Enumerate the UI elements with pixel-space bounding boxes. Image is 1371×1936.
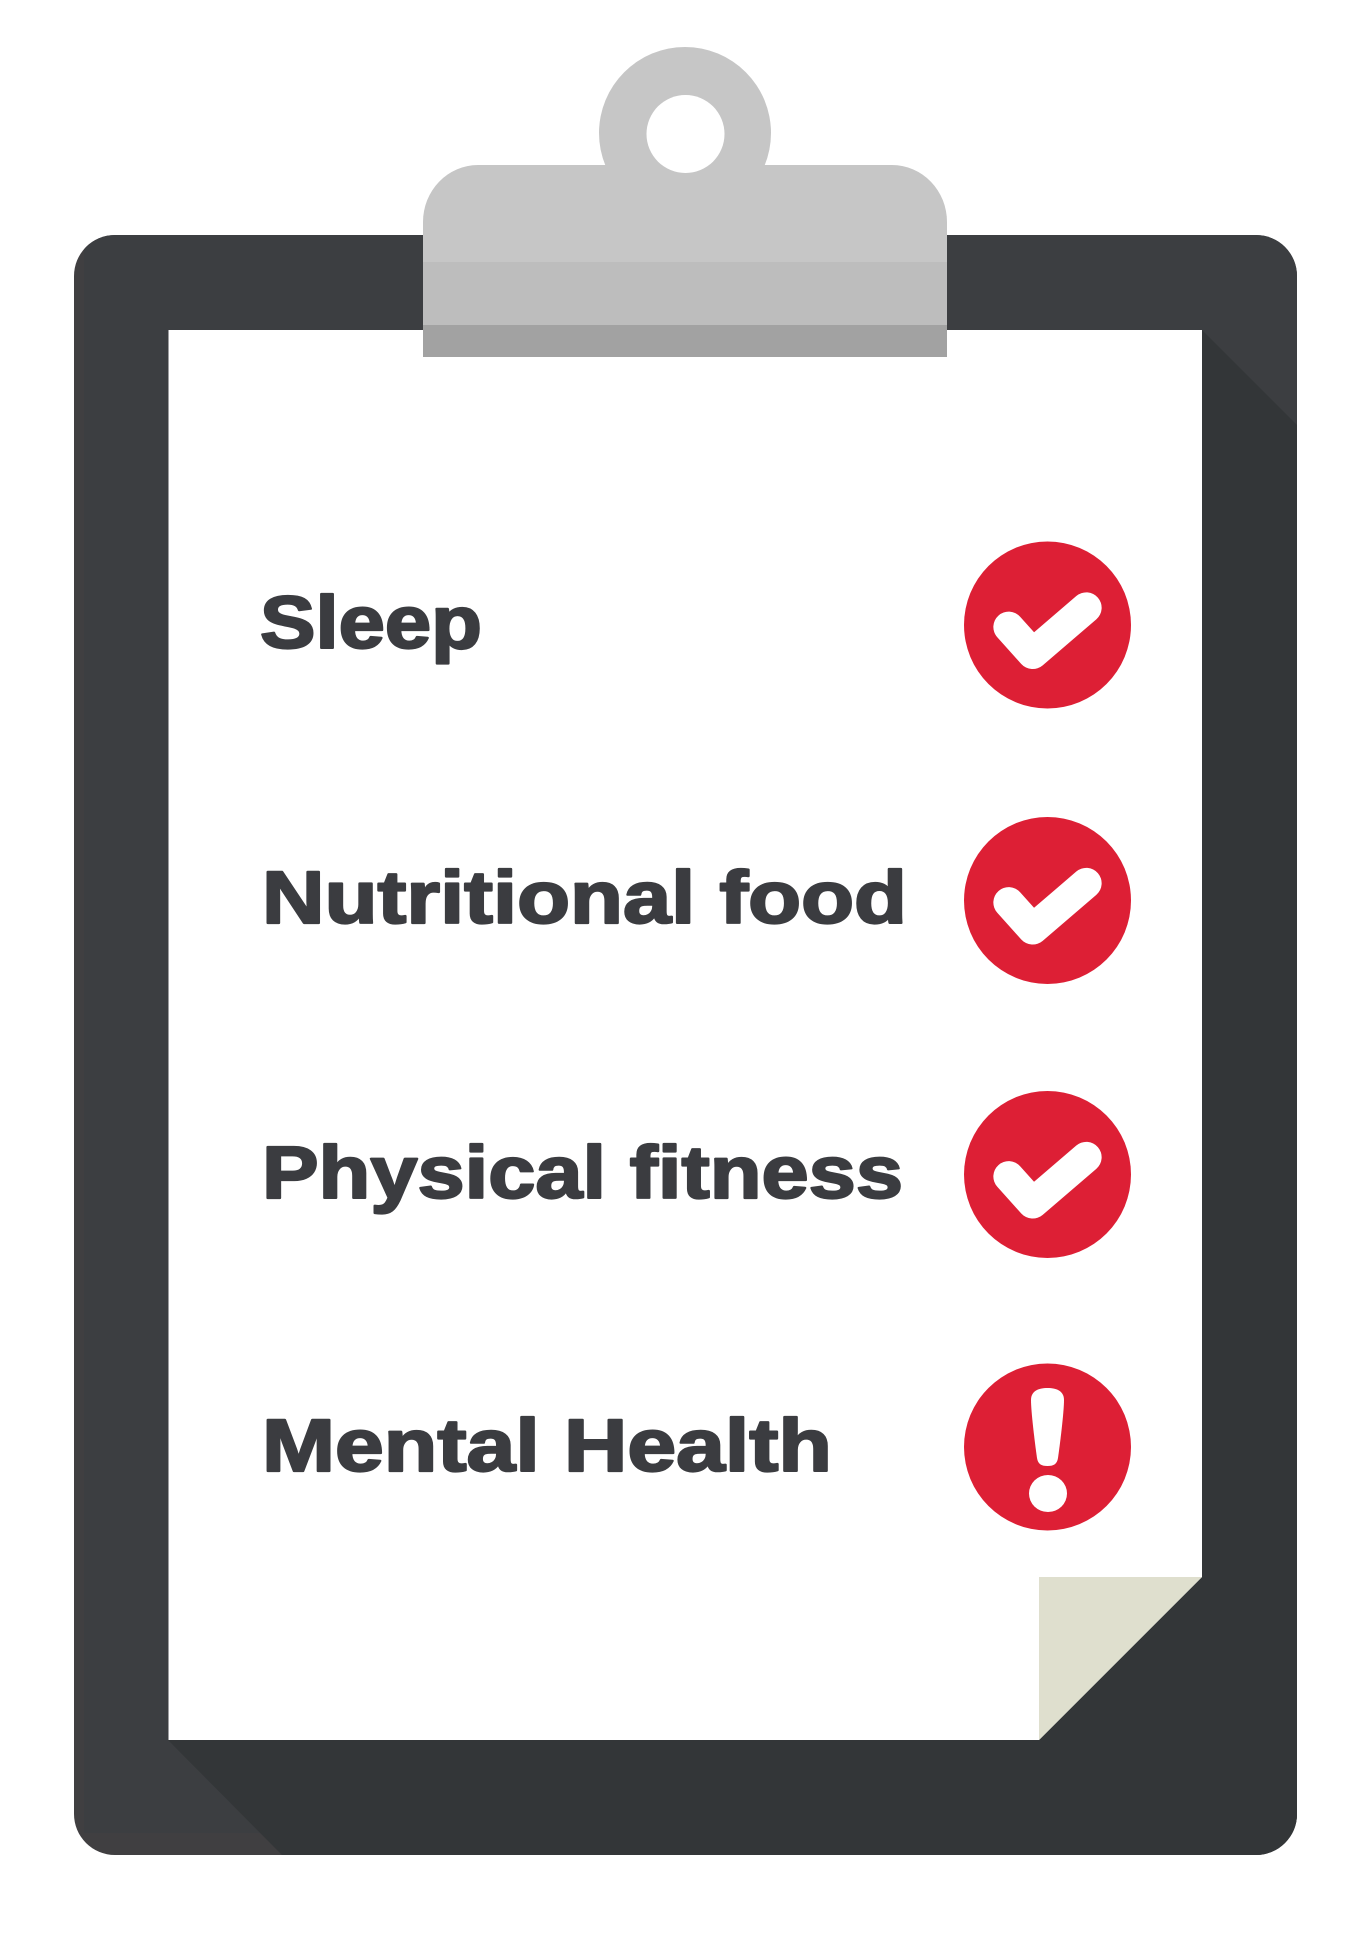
item label: Nutritional food: Nutritional food — [262, 856, 907, 939]
item label: Sleep: Sleep — [260, 581, 482, 664]
clip hole — [646, 95, 724, 173]
board shadow cast by paper — [168, 330, 1297, 1855]
clip mid band — [423, 262, 947, 325]
clip ring — [599, 47, 771, 219]
paper sheet — [168, 330, 1202, 1740]
clipboard board — [74, 235, 1297, 1855]
icon: check mark Nutritional food — [964, 817, 1131, 984]
item label: Physical fitness: Physical fitness — [262, 1131, 903, 1214]
item label: Mental Health: Mental Health — [262, 1404, 832, 1487]
icon: check mark Physical fitness — [964, 1091, 1131, 1258]
clip body — [423, 165, 947, 357]
clip lower band — [423, 325, 947, 357]
icon: check mark Sleep — [964, 542, 1131, 708]
icon: exclamation mark Mental Health — [964, 1364, 1131, 1530]
paper folded corner — [1039, 1577, 1202, 1740]
metal clip — [423, 47, 947, 357]
